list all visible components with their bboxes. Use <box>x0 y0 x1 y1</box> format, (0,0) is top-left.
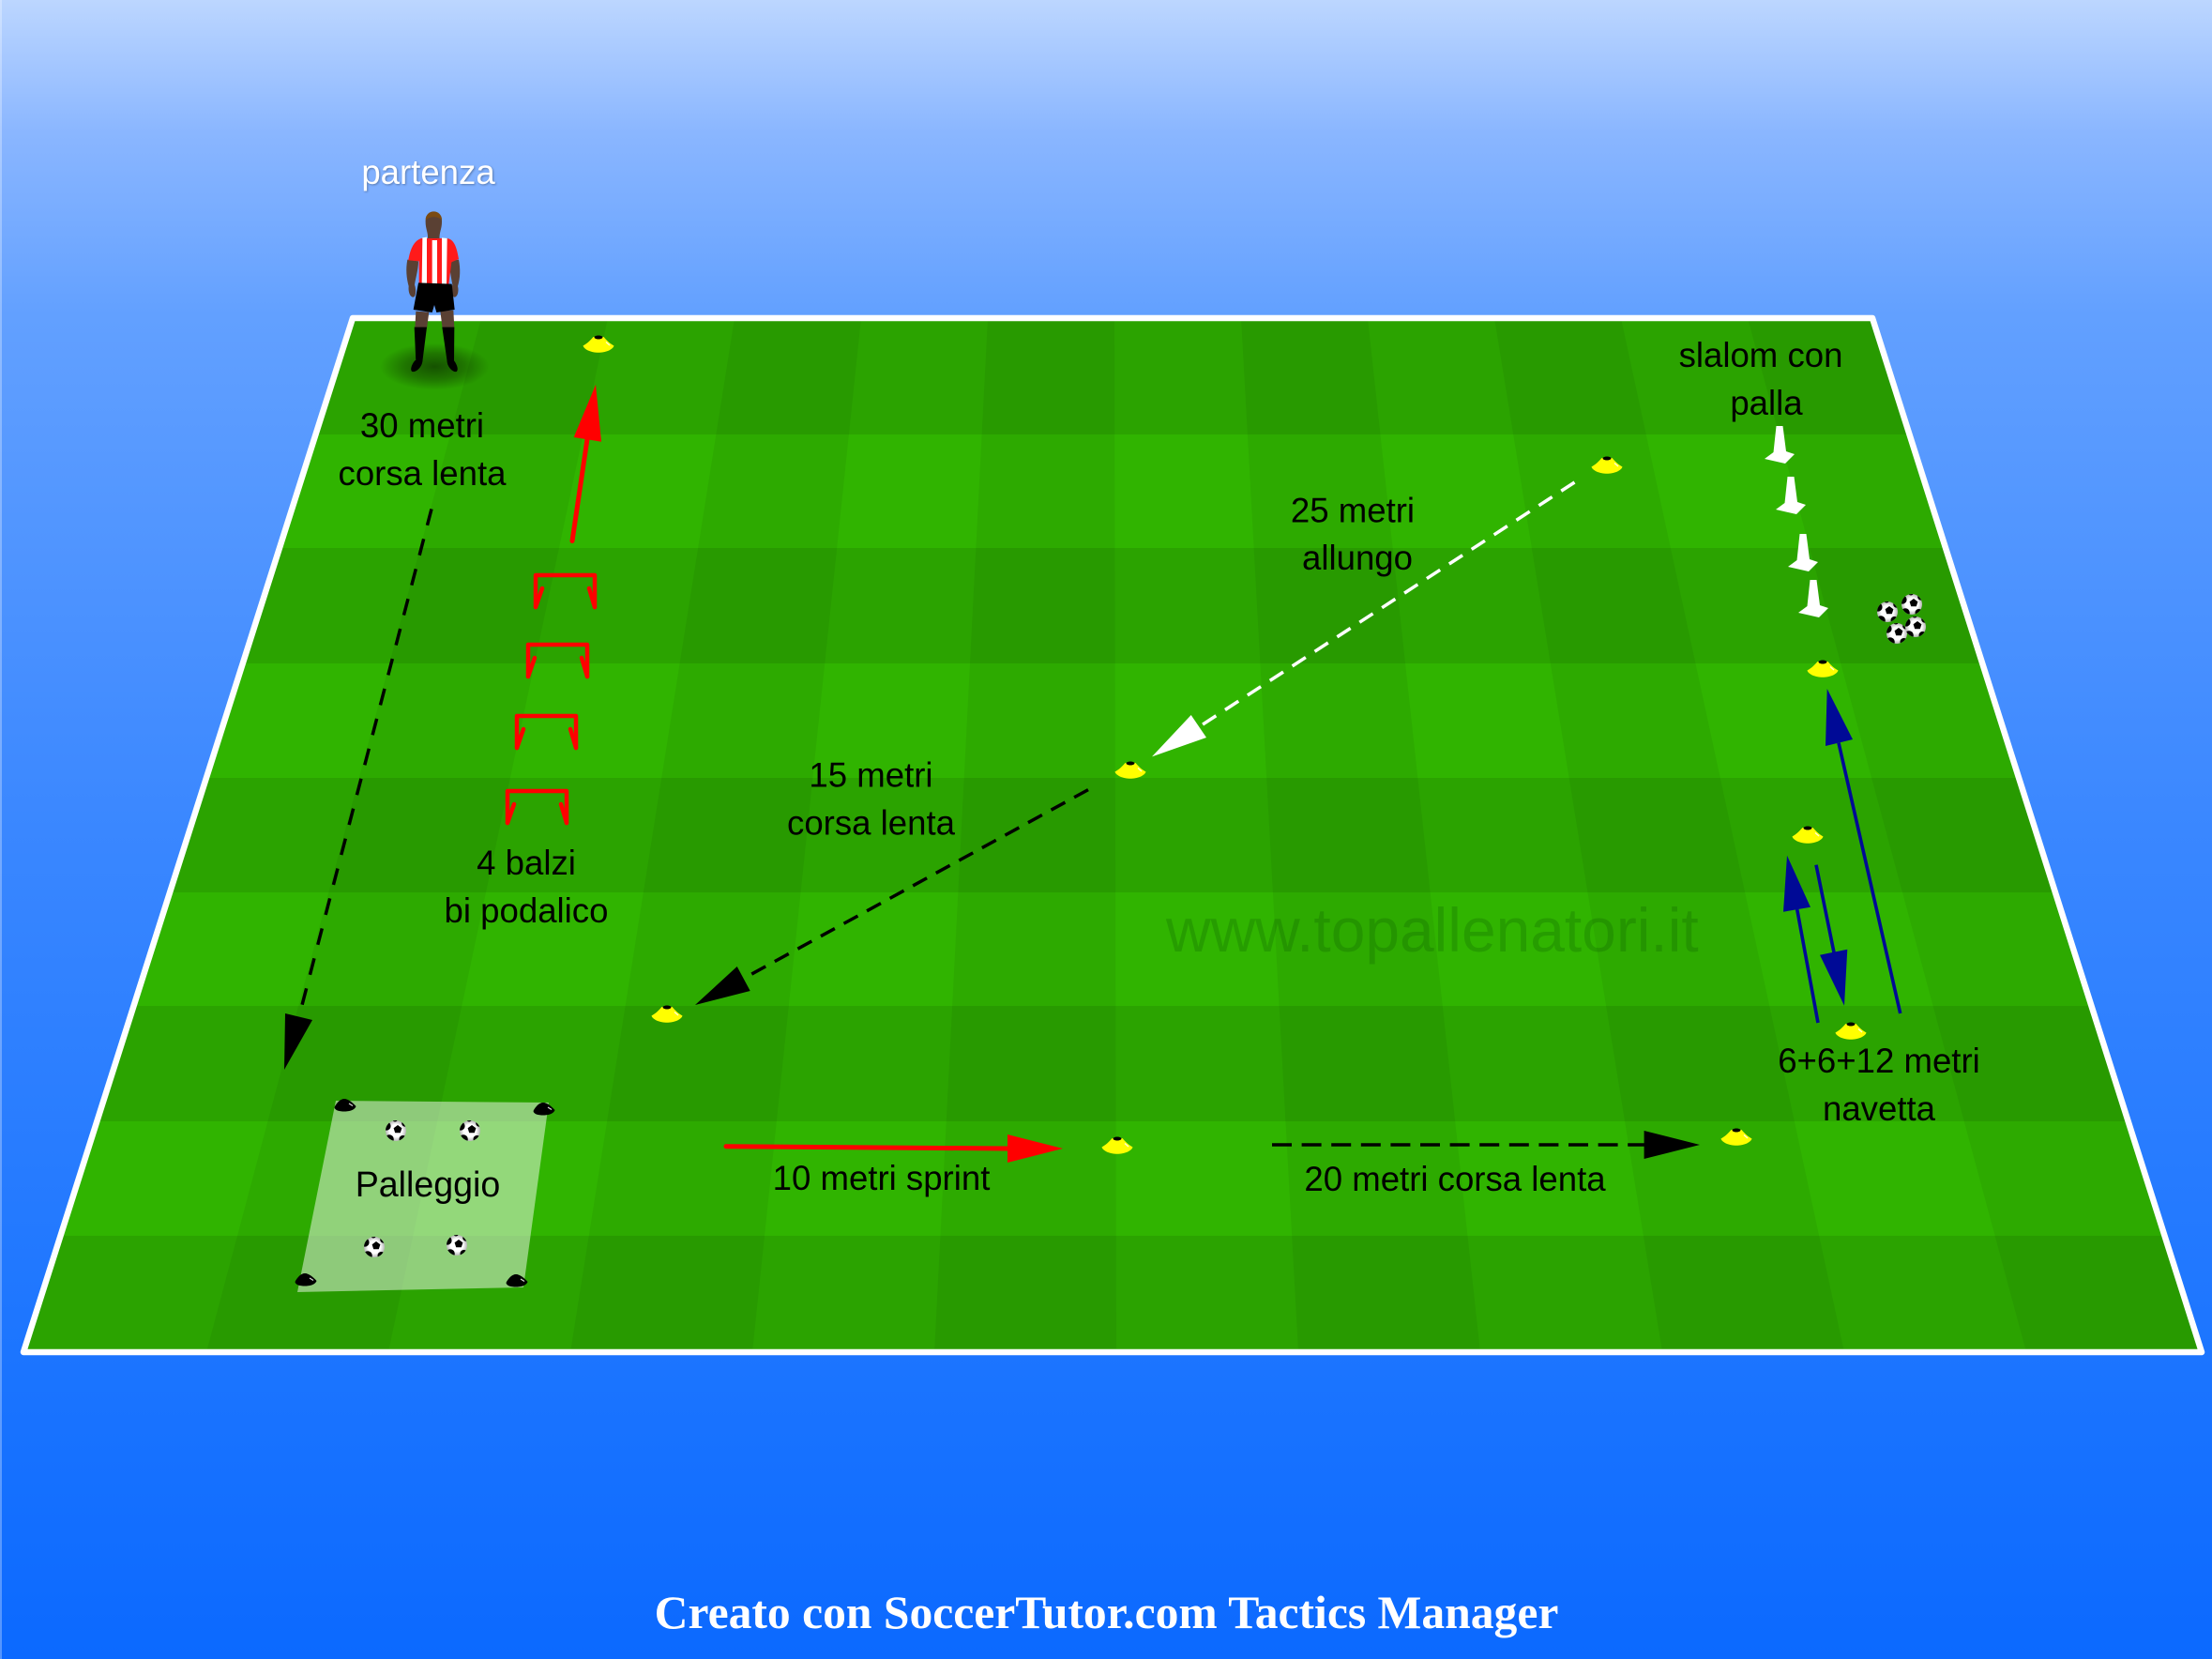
text: 4 balzi bi podalico <box>445 844 608 930</box>
text: slalom con palla: palla <box>1730 384 1803 422</box>
text: slalom con palla: slalom con <box>1679 336 1842 374</box>
corner cones <box>295 1099 555 1287</box>
cone: lower left diagonal <box>651 1006 683 1023</box>
cone: upper right <box>1591 456 1623 474</box>
arrow: dashed black down left <box>284 509 432 1070</box>
player shirt <box>408 238 459 284</box>
cone: shuttle mid <box>1792 826 1824 844</box>
arrow: red run up <box>572 385 601 540</box>
shirt stripes <box>422 237 447 284</box>
arrow: blue shuttle down <box>1816 865 1847 1006</box>
text: 30 metri corsa lenta: corsa lenta <box>339 454 507 493</box>
hurdle 2 <box>528 645 587 677</box>
text: 6+6+12 metri navetta: 6+6+12 metri <box>1778 1042 1980 1080</box>
cone: shuttle start <box>1835 1023 1867 1040</box>
text: 20 metri corsa lenta: 20 metri corsa lenta <box>1304 1160 1606 1198</box>
slalom poles <box>1765 426 1828 617</box>
player hair <box>426 211 442 228</box>
player at start <box>380 211 490 390</box>
hurdle 3 <box>517 716 576 748</box>
cone: top yellow <box>583 336 614 353</box>
hurdle 4 <box>508 791 567 823</box>
balls in grid <box>360 1117 483 1260</box>
player legs <box>415 311 454 328</box>
balls group <box>1873 589 1929 647</box>
arrow: blue shuttle up <box>1783 856 1818 1023</box>
text: 25 metri allungo: 25 metri <box>1291 492 1415 529</box>
panel: football pitch <box>0 318 2212 1352</box>
player shorts <box>414 282 455 312</box>
player socks <box>415 327 454 361</box>
panel: palleggio grid <box>295 1099 555 1292</box>
text: slalom con palla <box>1679 336 1842 422</box>
arrow: dashed white diagonal <box>1152 482 1574 756</box>
arrow: dashed black right <box>1272 1131 1700 1159</box>
player shadow <box>380 343 490 390</box>
text: 4 balzi bi podalico: bi podalico <box>445 891 608 930</box>
arrow: dashed black diagonal <box>695 790 1088 1005</box>
arrow: red sprint <box>726 1134 1063 1163</box>
player arms <box>406 260 460 297</box>
cone: sprint end <box>1101 1137 1133 1154</box>
text: 15 metri corsa lenta: 15 metri <box>809 756 933 794</box>
text: 10 metri sprint: 10 metri sprint <box>773 1159 990 1197</box>
text: 25 metri allungo: allungo <box>1302 539 1413 577</box>
cone: right end of lower row <box>1720 1128 1752 1146</box>
text: 6+6+12 metri navetta: navetta <box>1823 1089 1936 1128</box>
text: Palleggio: Palleggio <box>356 1164 500 1204</box>
hurdle 1 <box>536 575 595 607</box>
text: 30 metri corsa lenta <box>339 406 507 493</box>
text: 15 metri corsa lenta <box>787 756 956 843</box>
watermark: www.topallenatori.it <box>1165 895 1699 965</box>
label: partenza: partenza <box>361 153 495 191</box>
hurdles <box>508 575 595 823</box>
text: 15 metri corsa lenta: corsa lenta <box>787 803 956 843</box>
cone: middle <box>1114 762 1146 779</box>
text: 30 metri corsa lenta: 30 metri <box>360 406 484 445</box>
arrow: blue long <box>1826 689 1901 1013</box>
text: 4 balzi bi podalico: 4 balzi <box>477 844 576 882</box>
cone: slalom start <box>1807 661 1839 677</box>
player boots <box>411 360 458 372</box>
text: 25 metri allungo <box>1291 492 1415 577</box>
text: 6+6+12 metri navetta <box>1778 1042 1980 1128</box>
footer credit: Creato con SoccerTutor.com Tactics Manager <box>655 1587 1558 1638</box>
player head <box>426 217 442 239</box>
